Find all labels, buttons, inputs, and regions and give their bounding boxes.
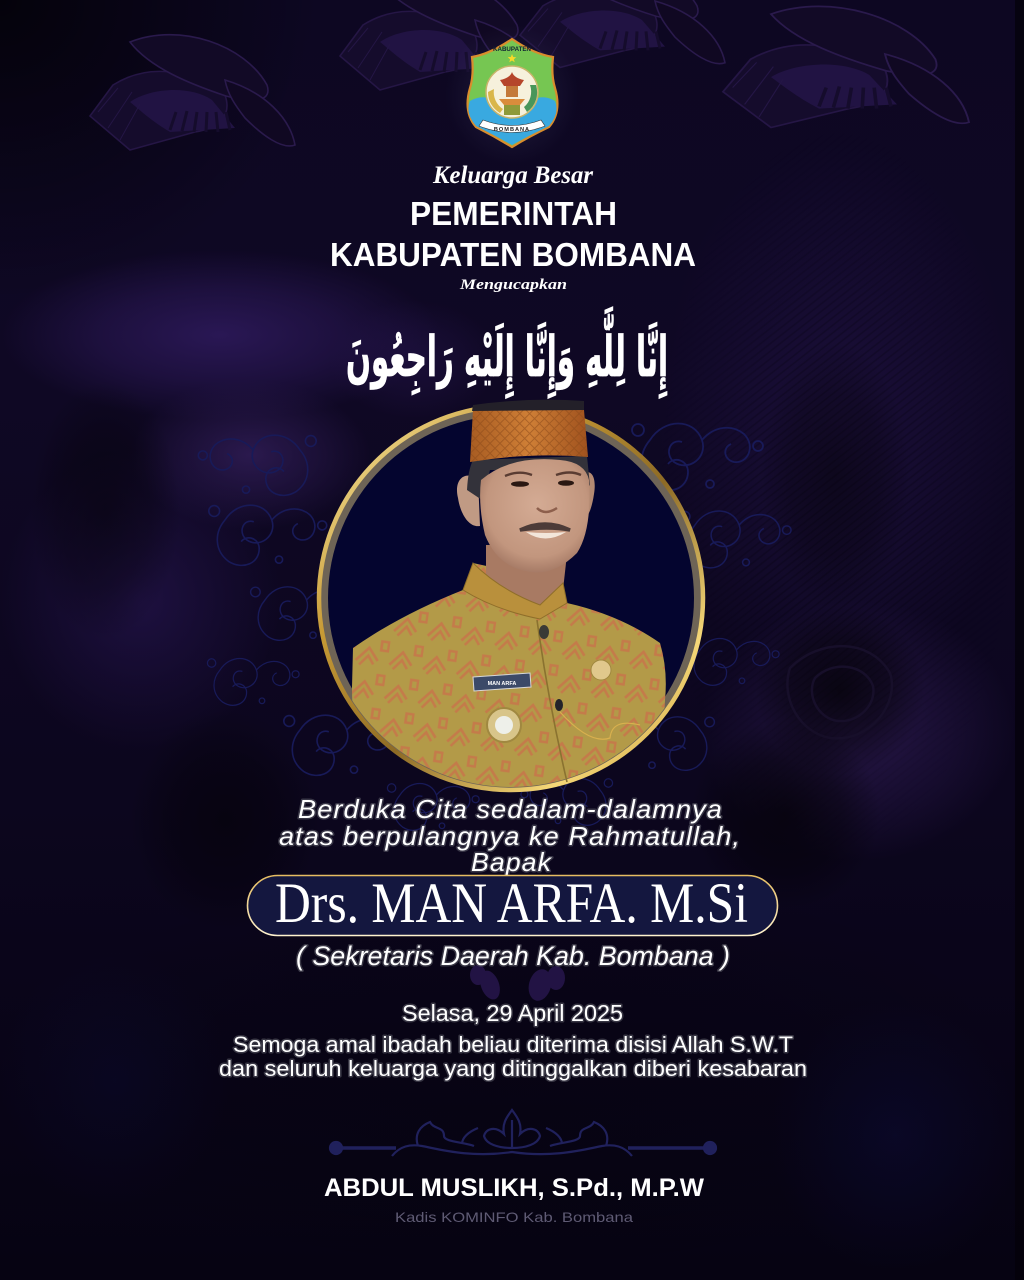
prayer text: Semoga amal ibadah beliau diterima disisi Allah S.W.T — [233, 1032, 793, 1057]
leaf cluster right — [723, 6, 969, 127]
flower behind text — [470, 965, 565, 1003]
jacket — [352, 563, 666, 800]
hat — [470, 410, 588, 462]
arabic calligraphy: إِنَّا لِلَّٰهِ وَإِنَّا إِلَيْهِ رَاجِعُونَ — [346, 306, 668, 399]
badges and buttons — [487, 708, 521, 742]
leaf cluster centre — [340, 0, 545, 90]
name tag — [473, 673, 531, 691]
prayer text: dan seluruh keluarga yang ditinggalkan diberi kesabaran — [219, 1056, 807, 1081]
signatory name: ABDUL MUSLIKH, S.Pd., M.P.W — [324, 1174, 704, 1202]
ornament divider — [330, 1110, 716, 1156]
heading: Pemerintah Kabupaten Bombana: KABUPATEN BOMBANA — [330, 236, 696, 273]
nose — [537, 508, 557, 512]
face — [480, 459, 590, 573]
date: Selasa, 29 April 2025 — [402, 1000, 623, 1026]
condolence text: atas berpulangnya ke Rahmatullah, — [279, 821, 741, 851]
subheading: Mengucapkan: Mengucapkan — [459, 277, 567, 293]
heading: Pemerintah Kabupaten Bombana: PEMERINTAH — [410, 195, 617, 232]
logo ribbon — [479, 120, 545, 132]
heading: Keluarga Besar: Keluarga Besar — [432, 162, 593, 189]
ears — [457, 475, 480, 526]
logo: Kabupaten Bombana shield — [446, 25, 578, 165]
gold ring — [319, 406, 703, 790]
placket — [537, 620, 567, 782]
logo text: KABUPATEN — [493, 46, 531, 53]
leaf cluster centre right — [520, 0, 725, 68]
leaf cluster left — [90, 35, 295, 150]
heading: Pemerintah Kabupaten Bombana — [330, 195, 696, 273]
portrait background — [328, 415, 694, 781]
condolence text — [279, 794, 741, 877]
decorative dark roses and branch — [0, 340, 1020, 1270]
condolence text: Bapak — [471, 847, 553, 877]
portrait: man in traditional dress — [352, 400, 666, 800]
brows and eyes — [505, 472, 581, 476]
signatory title: Kadis KOMINFO Kab. Bombana — [395, 1209, 633, 1225]
person name: Drs. MAN ARFA. M.Si — [275, 872, 748, 935]
name tag: MAN ARFA — [488, 681, 516, 687]
role: ( Sekretaris Daerah Kab. Bombana ) — [296, 941, 730, 971]
decorative leaves top — [90, 0, 969, 150]
prayer text — [219, 1032, 807, 1081]
name banner — [248, 872, 778, 936]
condolence text: Berduka Cita sedalam-dalamnya — [298, 794, 723, 824]
arabesque ornaments around portrait — [198, 424, 791, 830]
portrait frame and photo — [319, 400, 703, 800]
moustache and mouth — [520, 524, 570, 530]
hair — [467, 456, 590, 500]
logo: Kabupaten Bombana shield: BOMBANA — [494, 127, 530, 133]
collar — [463, 563, 567, 619]
neck — [486, 545, 568, 617]
